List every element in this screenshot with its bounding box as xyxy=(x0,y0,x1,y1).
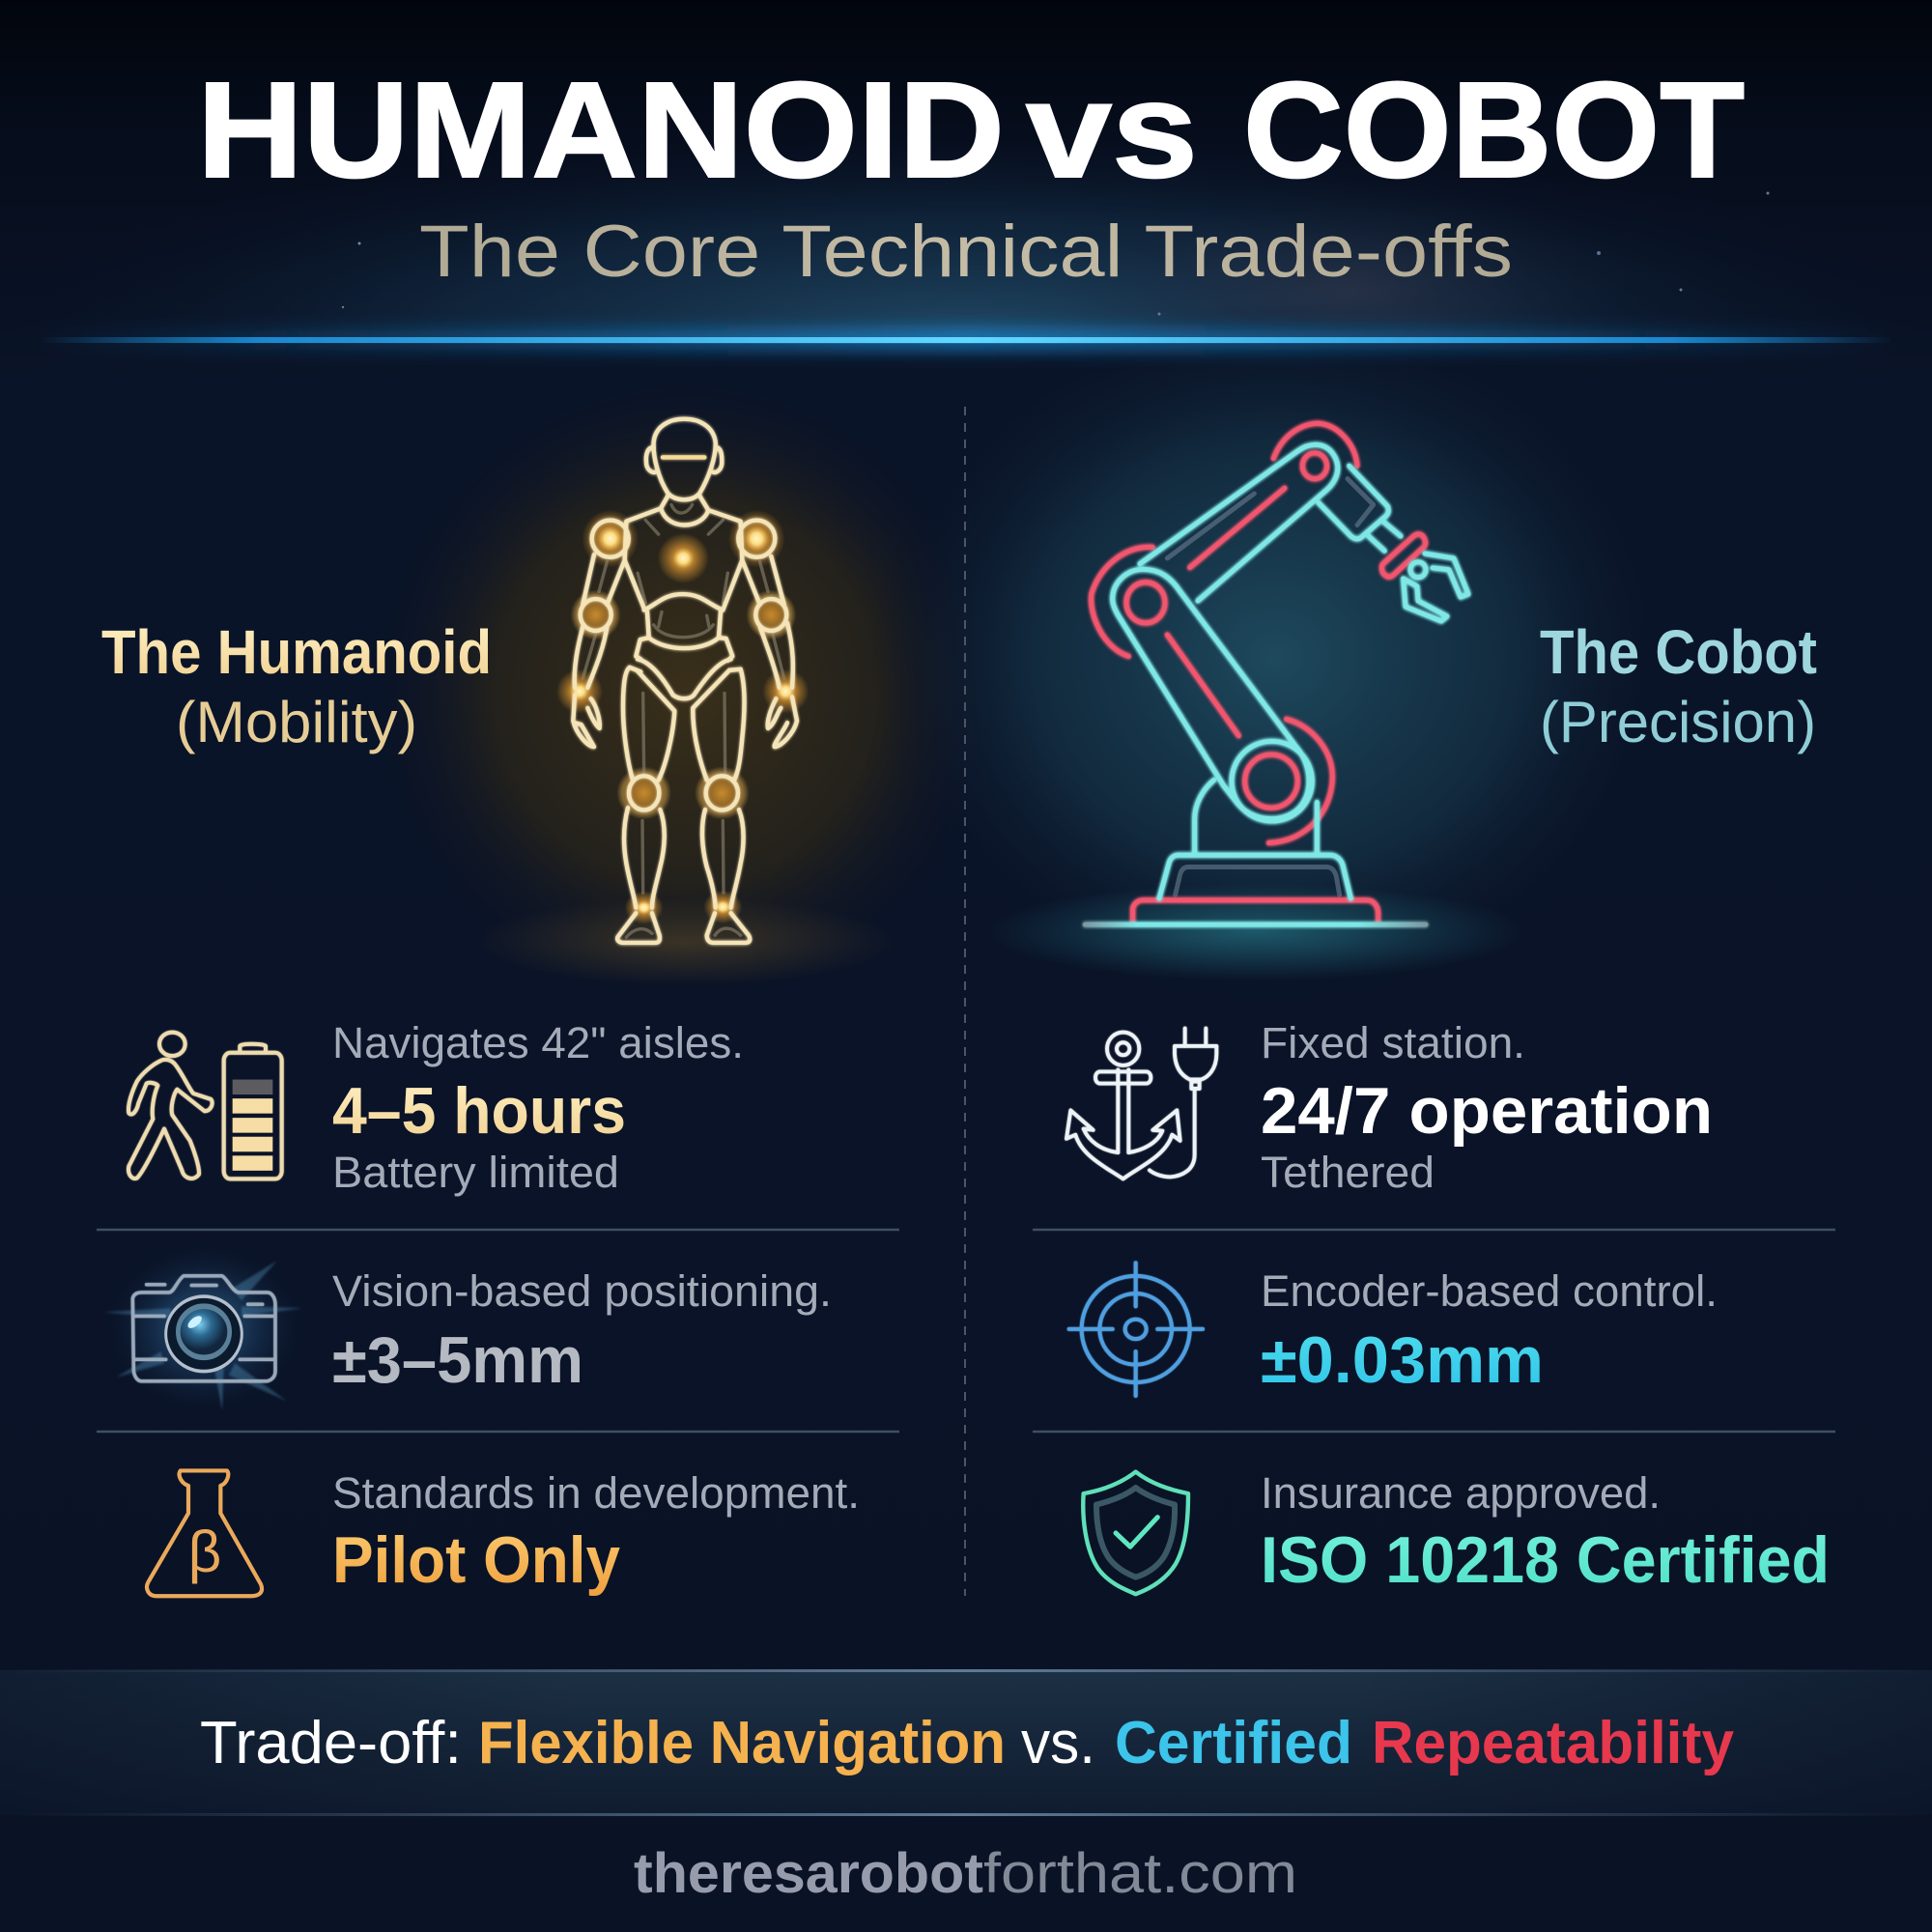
spec text: runtime: 4–5 hours xyxy=(332,1074,626,1148)
spec text: operation xyxy=(1261,1018,1713,1197)
website footer: theresarobot xyxy=(634,1842,983,1905)
cyan arm outline xyxy=(1085,444,1468,924)
website footer: forthat.com xyxy=(983,1842,1297,1905)
icon: beta flask xyxy=(147,1470,262,1596)
subtitle: The Core Technical Trade-offs xyxy=(419,211,1513,293)
inner shading lines xyxy=(582,504,784,937)
icon: anchor and plug xyxy=(1066,1028,1216,1179)
spec text: control: Encoder-based control. xyxy=(1261,1266,1718,1316)
title: HUMANOID xyxy=(197,53,1005,206)
joint glows xyxy=(556,510,809,924)
footer band: trade-off summary: vs. xyxy=(1021,1710,1095,1776)
icon: camera xyxy=(99,1237,311,1419)
heading: the cobot xyxy=(1540,617,1817,754)
spec text: positioning: Vision-based positioning. xyxy=(332,1266,832,1316)
red accents xyxy=(1092,423,1426,923)
spec text: positioning: ±3–5mm xyxy=(332,1323,583,1397)
icon: walking person and battery xyxy=(128,1033,282,1179)
footer band: trade-off summary: Trade-off: xyxy=(200,1710,462,1776)
center dashed divider xyxy=(964,407,966,1596)
footer band: trade-off summary: Repeatability xyxy=(1372,1710,1734,1776)
spec text: runtime xyxy=(332,1018,744,1197)
spec text: certification: ISO 10218 Certified xyxy=(1261,1523,1830,1597)
spec text: certification status xyxy=(332,1468,860,1597)
footer band: trade-off summary xyxy=(0,1669,1932,1816)
icon: beta flask: β xyxy=(188,1520,221,1584)
heading: the humanoid: The Humanoid xyxy=(101,617,492,687)
title: vs xyxy=(1026,53,1198,206)
spec text: operation: Tethered xyxy=(1261,1148,1435,1197)
spec text: certification: Insurance approved. xyxy=(1261,1468,1661,1518)
spec text: certification xyxy=(1261,1468,1830,1597)
spec text: operation: Fixed station. xyxy=(1261,1018,1525,1067)
heading: the cobot: (Precision) xyxy=(1540,690,1816,754)
muted inner lines xyxy=(1167,479,1374,895)
icon: target crosshair xyxy=(1069,1263,1203,1396)
spec text: operation: 24/7 operation xyxy=(1261,1074,1713,1148)
icon: shield with check xyxy=(1083,1472,1188,1594)
panel: humanoid specifications xyxy=(97,1018,899,1597)
background xyxy=(0,0,1932,980)
footer band: trade-off summary: Flexible Navigation xyxy=(478,1710,1006,1776)
illustration: cobot robot arm xyxy=(1085,423,1468,924)
title xyxy=(197,53,1745,206)
spec text: control: ±0.03mm xyxy=(1261,1323,1544,1397)
spec text: certification status: Pilot Only xyxy=(332,1523,620,1597)
header divider glow line xyxy=(39,330,1893,350)
website footer xyxy=(634,1842,1297,1905)
heading: the cobot: The Cobot xyxy=(1540,617,1817,687)
spec text: positioning xyxy=(332,1266,832,1397)
spec text: runtime: Battery limited xyxy=(332,1148,619,1197)
title: COBOT xyxy=(1243,53,1745,206)
heading: the humanoid xyxy=(101,617,492,754)
spec text: runtime: Navigates 42" aisles. xyxy=(332,1018,744,1067)
spec text: control xyxy=(1261,1266,1718,1397)
footer band: trade-off summary: Certified xyxy=(1115,1710,1352,1776)
panel: cobot specifications xyxy=(1033,1018,1835,1597)
heading: the humanoid: (Mobility) xyxy=(176,690,417,754)
body outline xyxy=(573,419,797,943)
illustration: humanoid robot xyxy=(556,419,809,943)
spec text: certification status: Standards in development. xyxy=(332,1468,860,1518)
